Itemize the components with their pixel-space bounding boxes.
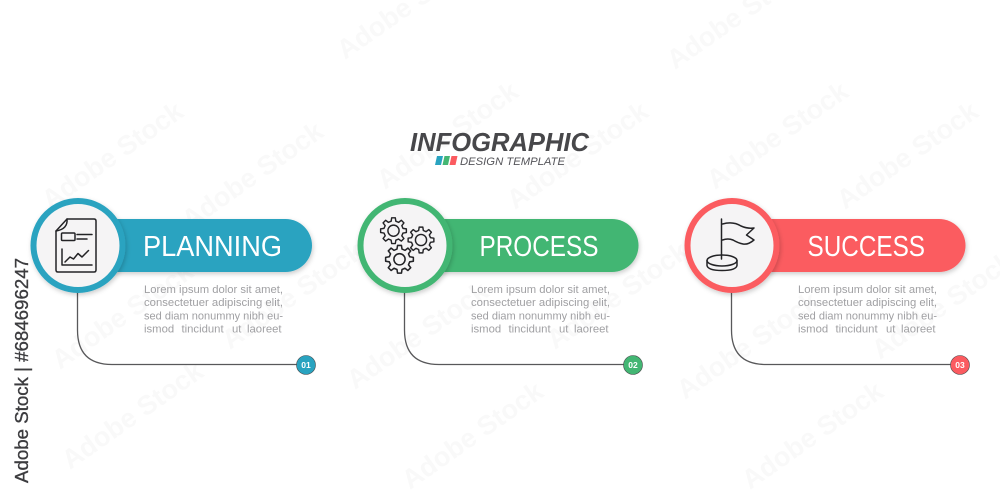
description text bbox=[798, 284, 937, 336]
watermark pattern: Adobe Stock bbox=[176, 115, 329, 235]
description text: Lorem ipsum dolor sit amet, bbox=[144, 284, 283, 296]
number badge 02 bbox=[624, 356, 642, 374]
circle badge bbox=[34, 201, 122, 290]
icon: colour stripes bbox=[435, 156, 458, 165]
stock id side text: Adobe Stock | #684696247 bbox=[12, 258, 32, 483]
number badge 01 bbox=[296, 356, 316, 374]
description text: Lorem ipsum dolor sit amet, bbox=[471, 284, 610, 296]
watermark pattern: Adobe Stock bbox=[341, 275, 494, 395]
description text: sed diam nonummy nibh eu- bbox=[471, 310, 610, 322]
subheading: DESIGN TEMPLATE bbox=[460, 156, 566, 168]
banner label: PROCESS bbox=[480, 231, 598, 263]
watermark pattern: Adobe Stock bbox=[216, 235, 369, 355]
description text: consectetuer adipiscing elit, bbox=[144, 297, 283, 309]
number badge 02: 02 bbox=[628, 360, 638, 370]
description text: tincidunt bbox=[182, 324, 224, 336]
description text: tincidunt bbox=[508, 324, 551, 336]
description text: sed diam nonummy nibh eu- bbox=[798, 310, 937, 322]
watermark pattern: Adobe Stock bbox=[736, 375, 889, 495]
description text: ismod bbox=[798, 324, 828, 336]
description text: tincidunt bbox=[836, 324, 878, 336]
icon: gears bbox=[381, 218, 434, 273]
watermark pattern: Adobe Stock bbox=[371, 75, 524, 195]
description text: laoreet bbox=[574, 324, 609, 336]
connector line bbox=[404, 292, 625, 364]
watermark pattern: Adobe Stock bbox=[541, 235, 694, 355]
number badge 03 bbox=[950, 356, 970, 374]
panel: process bbox=[360, 201, 642, 374]
description text: sed diam nonummy nibh eu- bbox=[144, 310, 283, 322]
title bbox=[410, 127, 590, 168]
description text: laoreet bbox=[901, 324, 936, 336]
banner bbox=[78, 219, 312, 272]
watermark pattern: Adobe Stock bbox=[501, 95, 654, 215]
description text: consectetuer adipiscing elit, bbox=[798, 297, 937, 309]
number badge 03: 03 bbox=[955, 360, 965, 370]
description text bbox=[471, 284, 610, 336]
description text: consectetuer adipiscing elit, bbox=[471, 297, 610, 309]
banner bbox=[405, 219, 638, 272]
watermark pattern: Adobe Stock bbox=[701, 75, 854, 195]
description text: ut bbox=[886, 324, 896, 336]
connector line bbox=[78, 292, 298, 364]
banner label: SUCCESS bbox=[808, 231, 925, 263]
circle badge bbox=[688, 201, 776, 290]
description text: laoreet bbox=[247, 324, 282, 336]
description text bbox=[144, 284, 283, 336]
icon: report document bbox=[56, 219, 96, 272]
heading: infographic: INFOGRAPHIC bbox=[410, 127, 590, 157]
watermark pattern: Adobe Stock bbox=[831, 95, 984, 215]
circle badge bbox=[360, 201, 450, 290]
icon: flag bbox=[707, 219, 754, 270]
description text: ismod bbox=[471, 324, 501, 336]
description text: ut bbox=[559, 324, 569, 336]
description text: ismod bbox=[144, 324, 174, 336]
watermark pattern: Adobe Stock bbox=[36, 95, 189, 215]
watermark pattern: Adobe Stock bbox=[671, 285, 824, 405]
watermark pattern: Adobe Stock bbox=[46, 255, 199, 375]
watermark pattern: Adobe Stock bbox=[396, 375, 549, 495]
number badge 01: 01 bbox=[301, 360, 311, 370]
description text: ut bbox=[232, 324, 242, 336]
panel: success bbox=[688, 201, 970, 374]
panel: planning bbox=[34, 201, 316, 374]
description text: Lorem ipsum dolor sit amet, bbox=[798, 284, 937, 296]
banner label: PLANNING bbox=[143, 231, 282, 263]
connector line bbox=[732, 292, 952, 364]
banner bbox=[732, 219, 966, 272]
watermark pattern: Adobe Stock bbox=[56, 355, 209, 475]
